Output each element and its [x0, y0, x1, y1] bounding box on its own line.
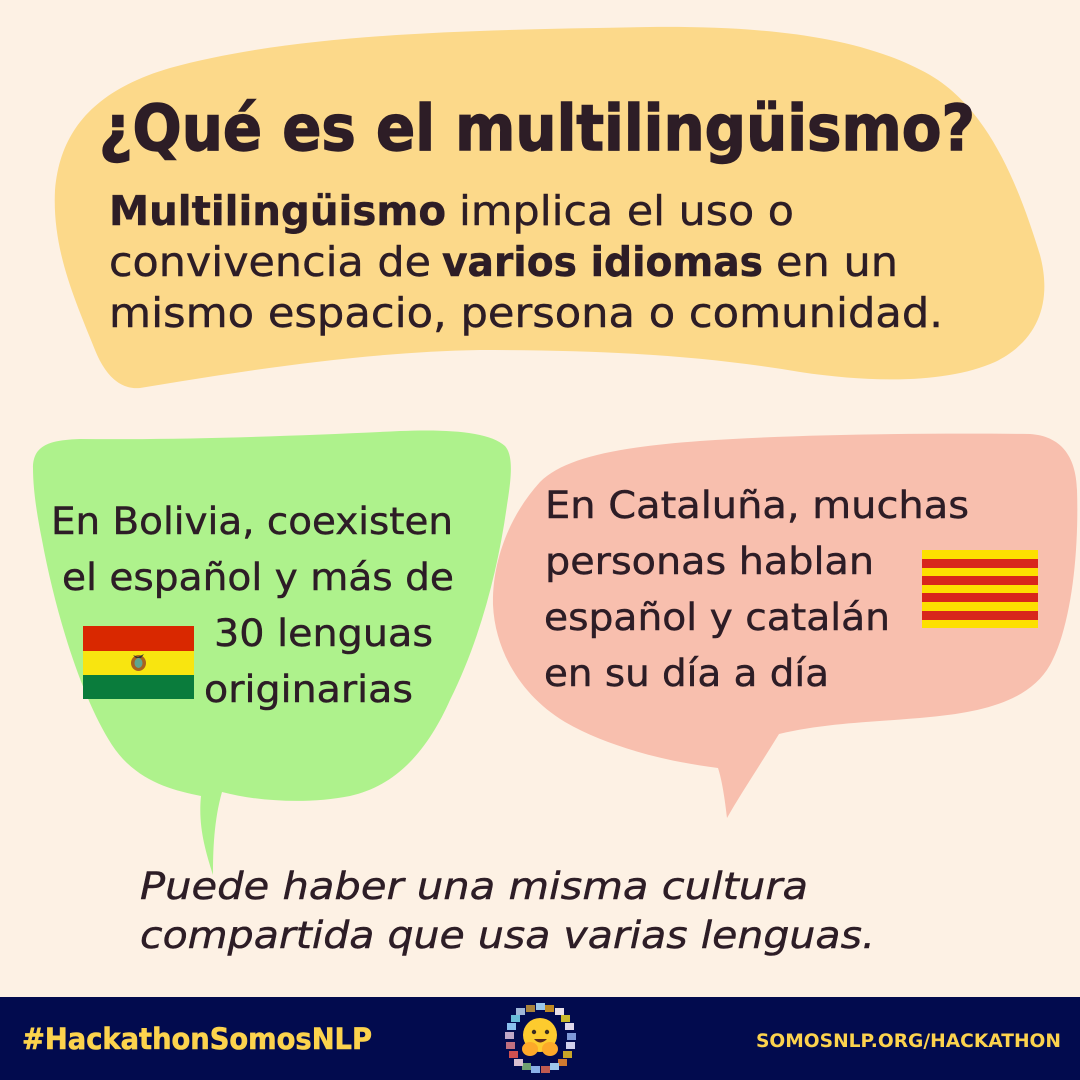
definition text: en un [776, 238, 898, 286]
Catalonia text: personas hablan [545, 540, 874, 583]
flag ring [505, 1003, 576, 1073]
definition text: convivencia de [109, 238, 431, 286]
title: ¿Qué es el multilingüismo? [99, 92, 975, 165]
definition text: varios idiomas [442, 238, 763, 286]
definition text: implica el uso o [459, 187, 794, 235]
icon: face [523, 1018, 557, 1052]
Bolivia text: En Bolivia, coexisten [51, 500, 453, 543]
icon: Bolivia flag [83, 626, 194, 699]
panel: Bolivia speech bubble [33, 430, 511, 875]
definition text: mismo espacio, persona o comunidad. [109, 289, 943, 337]
footer band [0, 997, 1080, 1080]
panel: definition speech bubble [55, 27, 1044, 388]
italic closing statement: Puede haber una misma cultura [140, 865, 808, 908]
italic closing statement: compartida que usa varias lenguas. [140, 914, 875, 957]
website link: SOMOSNLP.ORG/HACKATHON [756, 1030, 1061, 1052]
logo: flag ring and smiling hugging face [505, 1003, 576, 1073]
Bolivia text [51, 500, 454, 711]
Catalonia text: en su día a día [544, 652, 829, 695]
icon: Catalonia flag [922, 550, 1038, 628]
Bolivia text: el español y más de [62, 556, 454, 599]
italic closing statement [140, 865, 875, 957]
panel: Catalonia speech bubble [493, 434, 1077, 818]
definition text [109, 187, 943, 337]
Catalonia text: español y catalán [544, 596, 890, 639]
hashtag: #HackathonSomosNLP [22, 1022, 372, 1056]
Bolivia text: originarias [204, 668, 413, 711]
Catalonia text: En Cataluña, muchas [545, 484, 969, 527]
Catalonia text [544, 484, 969, 695]
Bolivia text: 30 lenguas [214, 612, 433, 655]
definition text: Multilingüismo [109, 187, 446, 235]
